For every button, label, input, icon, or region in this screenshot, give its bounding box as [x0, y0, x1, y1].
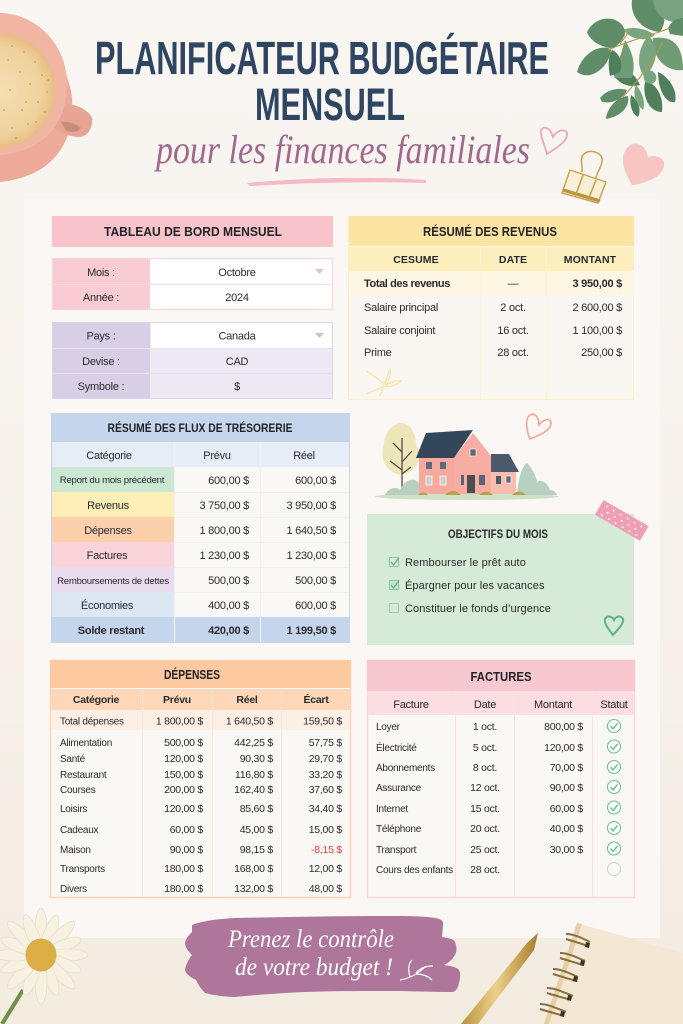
clip wire loop	[581, 151, 602, 180]
total row: Total dépenses	[60, 716, 124, 728]
total row: solde restant	[78, 625, 336, 637]
total row: solde restant: 1 199,50 $	[286, 625, 336, 637]
heading: factures: FACTURES	[470, 670, 532, 684]
icon: pink outline heart	[527, 414, 551, 439]
icon: green heart	[605, 616, 623, 635]
expense rows: 85,60 $	[240, 803, 273, 815]
expense rows: 442,25 $	[234, 737, 273, 749]
heading: tableau de bord	[52, 216, 333, 247]
expense rows: 15,00 $	[309, 824, 342, 836]
column headers: Montant	[534, 699, 572, 711]
bill rows: 5 oct.	[473, 742, 497, 754]
column headers: Date	[474, 699, 496, 711]
wing wall	[491, 472, 516, 494]
cash-flow rows: 500,00 $	[208, 575, 249, 587]
form: mois et année	[52, 258, 332, 310]
income rows: 16 oct.	[497, 325, 529, 337]
bill rows: 70,00 $	[550, 762, 583, 774]
expense rows	[60, 737, 342, 895]
expense rows: Alimentation	[60, 738, 112, 749]
expense rows: 33,20 $	[309, 769, 342, 781]
cash-flow rows: Remboursements de dettes	[57, 576, 169, 587]
expense rows: 500,00 $	[164, 737, 203, 749]
form: mois et année: Mois :	[87, 267, 115, 279]
cash-flow rows: 400,00 $	[208, 600, 249, 612]
bill rows: 20 oct.	[470, 823, 500, 835]
column headers: Écart	[303, 693, 329, 706]
column headers: Prévu	[203, 450, 231, 462]
cash-flow rows: 1 800,00 $	[200, 525, 249, 537]
icon: coffee cup	[0, 13, 92, 182]
form: pays, devise, symbole: CAD	[226, 356, 249, 368]
column headers: Statut	[600, 699, 628, 711]
title	[95, 32, 549, 130]
heading: factures	[367, 660, 635, 691]
cup handle	[53, 104, 92, 137]
expense rows: 45,00 $	[240, 824, 273, 836]
expense rows: 37,60 $	[309, 784, 342, 796]
coffee speckles	[4, 46, 48, 138]
bill rows: Transport	[376, 845, 417, 856]
icon: outline heart	[541, 128, 567, 154]
expense rows: 180,00 $	[164, 883, 203, 895]
bill rows: 800,00 $	[544, 721, 583, 733]
panel: tableau de bord	[52, 216, 333, 398]
bill rows: Électricité	[376, 741, 417, 754]
flower beds	[418, 491, 526, 495]
banner: call to action: de votre budget !	[235, 954, 393, 981]
column headers: Catégorie	[73, 694, 119, 706]
tree	[382, 423, 419, 495]
income rows: Prime	[364, 347, 392, 359]
income rows: 1 100,00 $	[572, 325, 622, 337]
title: MENSUEL	[255, 79, 405, 130]
subtitle underline	[247, 178, 426, 186]
cash-flow rows: Report du mois précédent	[60, 475, 165, 486]
panel: dépenses	[50, 660, 351, 898]
expense rows: 90,00 $	[170, 844, 203, 856]
cash-flow rows: 1 640,50 $	[286, 525, 336, 537]
expense rows: 162,40 $	[234, 784, 273, 796]
column headers: MONTANT	[564, 254, 617, 266]
banner: call to action: Prenez le contrôle	[227, 926, 394, 953]
checked item: rembourser le prêt auto: Rembourser le prêt auto	[405, 557, 526, 569]
income rows: Salaire conjoint	[364, 325, 435, 337]
total row: 3 950,00 $	[572, 278, 622, 290]
income rows	[364, 302, 622, 359]
heading: dépenses: DÉPENSES	[164, 667, 220, 682]
expense rows: 90,30 $	[240, 753, 273, 765]
icon: hand-drawn sprig	[400, 960, 433, 980]
expense rows: 29,70 $	[309, 753, 342, 765]
bill rows: Abonnements	[376, 763, 435, 774]
expense rows: 132,00 $	[234, 883, 273, 895]
income rows: Salaire principal	[364, 302, 438, 314]
icon: gold binder clip	[562, 151, 606, 203]
heading: flux de trésorerie	[51, 413, 350, 442]
form: pays, devise, symbole: $	[234, 381, 240, 393]
bill rows: Téléphone	[376, 824, 422, 835]
heading: résumé des revenus	[349, 216, 634, 246]
icon: yellow flower sketch	[366, 369, 401, 396]
expense rows: 168,00 $	[234, 863, 273, 875]
cup rim	[0, 13, 67, 155]
bill rows	[376, 721, 583, 876]
illustration: house	[375, 423, 559, 500]
expense rows: 48,00 $	[309, 883, 342, 895]
leaf stems	[608, 28, 670, 97]
main roof	[416, 430, 473, 458]
expense rows: Maison	[60, 845, 91, 856]
form: pays, devise, symbole	[52, 322, 332, 398]
form: mois et année: Année :	[83, 292, 119, 304]
bill rows: 90,00 $	[550, 782, 583, 794]
left wall	[419, 458, 455, 494]
cash-flow rows: Dépenses	[84, 525, 133, 537]
category colour cells	[52, 467, 349, 642]
expense rows: Cadeaux	[60, 825, 99, 836]
cash-flow rows	[57, 475, 336, 612]
status icons	[608, 720, 620, 876]
column headers	[51, 689, 350, 710]
gable wall	[454, 433, 491, 494]
total row: 159,50 $	[303, 716, 342, 728]
total row: —	[508, 278, 519, 290]
total row: 1 800,00 $	[156, 716, 203, 728]
total row: Total des revenus	[364, 278, 450, 290]
subtitle: pour les finances familiales	[153, 127, 530, 172]
income rows: 2 600,00 $	[572, 302, 622, 314]
heading: dépenses	[50, 660, 351, 688]
cash-flow rows: 600,00 $	[295, 600, 336, 612]
expense rows: 57,75 $	[309, 737, 342, 749]
heading: tableau de bord: TABLEAU DE BORD MENSUEL	[104, 225, 282, 239]
column headers	[368, 691, 634, 715]
cash-flow rows: Économies	[81, 599, 134, 612]
clip body	[562, 170, 606, 203]
column headers: Catégorie	[86, 450, 132, 462]
cash-flow rows: 1 230,00 $	[200, 550, 249, 562]
total row: 1 640,50 $	[226, 716, 273, 728]
column headers: DATE	[499, 254, 527, 266]
paper sheet	[24, 199, 660, 938]
bill rows: 1 oct.	[473, 721, 497, 733]
bill rows: 12 oct.	[470, 782, 500, 794]
bill rows: 15 oct.	[470, 803, 500, 815]
door and windows	[426, 449, 511, 493]
expense rows: 150,00 $	[164, 769, 203, 781]
expense rows: -8,15 $	[311, 844, 342, 856]
expense rows: Transports	[60, 864, 105, 875]
expense rows: 34,40 $	[309, 803, 342, 815]
bill rows: Assurance	[376, 783, 422, 794]
icon: green leaves	[577, 0, 683, 119]
cash-flow rows: Revenus	[87, 500, 130, 512]
expense rows: 180,00 $	[164, 863, 203, 875]
banner: call to action	[185, 916, 460, 997]
expense rows: 116,80 $	[235, 769, 273, 781]
form: pays, devise, symbole: Symbole :	[78, 381, 125, 393]
expense rows: Courses	[60, 785, 96, 796]
bill rows: 60,00 $	[550, 803, 583, 815]
icon: solid pink heart	[623, 144, 664, 185]
washi tape	[595, 500, 649, 541]
form: pays, devise, symbole: Devise :	[82, 356, 120, 368]
form: pays, devise, symbole: Canada	[218, 330, 257, 342]
column headers: Réel	[236, 694, 258, 706]
column headers: Prévu	[163, 694, 191, 706]
column headers: Facture	[393, 699, 429, 711]
column headers: CESUME	[393, 254, 439, 266]
panel: flux de trésorerie	[51, 413, 350, 642]
income rows: 28 oct.	[497, 347, 529, 359]
heading: résumé des revenus: RÉSUMÉ DES REVENUS	[423, 224, 557, 239]
bill rows: 8 oct.	[473, 762, 497, 774]
unchecked item: constituer le fonds d'urgence: Constituer le fonds d’urgence	[405, 603, 551, 615]
form: mois et année: 2024	[225, 292, 249, 304]
panel: factures	[367, 660, 635, 898]
column headers	[52, 442, 349, 467]
expense rows: 60,00 $	[170, 824, 203, 836]
checklist	[390, 557, 551, 615]
expense rows: 200,00 $	[164, 784, 203, 796]
total row: solde restant: 420,00 $	[208, 625, 249, 637]
bill rows: 30,00 $	[550, 844, 583, 856]
form: pays, devise, symbole: Pays :	[86, 330, 116, 342]
panel: résumé des revenus	[348, 216, 634, 400]
ground	[375, 493, 559, 500]
cash-flow rows: Factures	[87, 550, 128, 562]
icon: notebook	[540, 923, 683, 1024]
expense rows: Santé	[60, 754, 86, 765]
checked item: épargner pour les vacances: Épargner pour les vacances	[405, 579, 545, 592]
form: mois et année: Octobre	[218, 267, 256, 279]
column headers: Réel	[293, 450, 315, 462]
expense rows: Divers	[60, 884, 87, 895]
bill rows: Internet	[376, 804, 408, 815]
bill rows: Loyer	[376, 722, 401, 733]
expense rows: Loisirs	[60, 804, 87, 815]
total row	[349, 271, 634, 295]
bill rows: 28 oct.	[470, 864, 500, 876]
total row	[51, 710, 350, 730]
wing roof	[491, 454, 519, 472]
coffee surface	[0, 34, 55, 148]
expense rows: Restaurant	[60, 770, 107, 781]
cash-flow rows: 500,00 $	[295, 575, 336, 587]
cash-flow rows: 3 750,00 $	[200, 500, 249, 512]
expense rows: 120,00 $	[164, 803, 203, 815]
icon: gold pen	[461, 933, 538, 1024]
bill rows: Cours des enfants	[376, 865, 453, 876]
bill rows: 40,00 $	[550, 823, 583, 835]
total row: solde restant: Solde restant	[78, 625, 145, 637]
column headers	[349, 247, 634, 271]
expense rows: 12,00 $	[309, 863, 342, 875]
cash-flow rows: 600,00 $	[208, 475, 249, 487]
expense rows: 98,15 $	[240, 844, 273, 856]
heading: flux de trésorerie: RÉSUMÉ DES FLUX DE TRÉSORERIE	[108, 420, 292, 435]
cash-flow rows: 600,00 $	[295, 475, 336, 487]
income rows: 250,00 $	[581, 347, 622, 359]
shrubs	[385, 463, 557, 495]
expense rows: 120,00 $	[164, 753, 203, 765]
icon: daisy	[0, 908, 88, 1024]
bill rows: 120,00 $	[544, 742, 583, 754]
heading: objectifs du mois: OBJECTIFS DU MOIS	[448, 529, 548, 541]
income rows: 2 oct.	[500, 302, 526, 314]
cash-flow rows: 1 230,00 $	[286, 550, 336, 562]
bill rows: 25 oct.	[470, 844, 500, 856]
panel: objectifs du mois	[367, 514, 634, 645]
cup body	[0, 60, 72, 182]
cash-flow rows: 3 950,00 $	[286, 500, 336, 512]
